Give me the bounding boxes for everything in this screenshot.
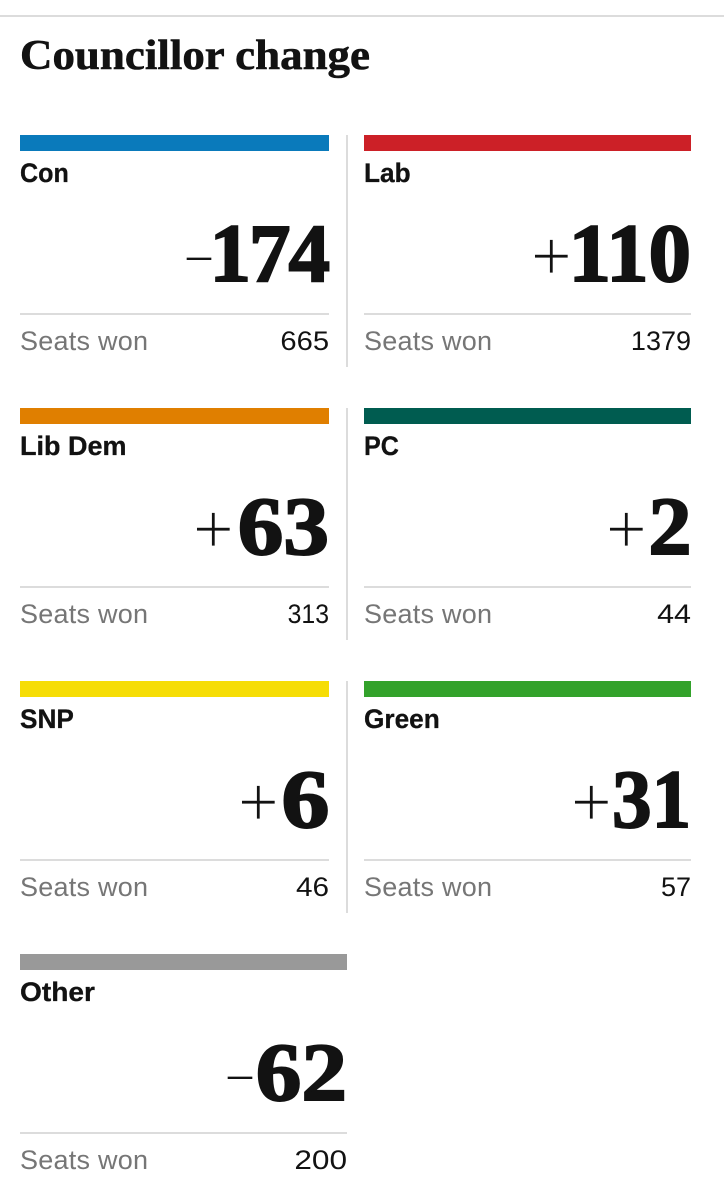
panel: PC [364,408,691,629]
panel: Lab [364,135,691,356]
panel: Green: Green [364,704,440,734]
panel: Con: 174 [210,207,328,299]
panel: Green: Seats won [364,872,492,902]
panel: Lab: Lab [364,158,411,188]
panel: Other: Seats won [20,1145,148,1175]
panel: Other: 62 [256,1026,347,1118]
panel: Con: – [187,228,211,281]
panel: Other: – [228,1047,252,1100]
panel: Lab: 1379 [631,326,691,356]
panel: Green: 57 [661,872,691,902]
panel: SNP: SNP [20,704,74,734]
panel: Lab: + [531,216,572,296]
panel: Con: Seats won [20,326,148,356]
panel: SNP: 6 [281,753,329,845]
panel: Lib Dem: Seats won [20,599,148,629]
panel: Lib Dem: 63 [238,480,329,572]
panel: SNP: 46 [296,872,329,902]
panel: Lib Dem: + [193,489,234,569]
panel: Lab: Seats won [364,326,492,356]
panel: Lib Dem [20,408,329,629]
panel: Other: 200 [294,1145,347,1175]
panel: Lab: 110 [569,207,691,299]
panel: SNP [20,681,329,902]
panel: Lib Dem: 313 [288,599,329,629]
panel: Green [364,681,691,902]
panel: Con: Con [20,158,69,188]
panel: PC: Seats won [364,599,492,629]
panel: SNP: Seats won [20,872,148,902]
panel: Other [20,954,347,1175]
panel: Con: 665 [280,326,329,356]
panel: Lib Dem: Lib Dem [20,431,127,461]
panel: PC: + [606,489,647,569]
panel: PC: 44 [657,599,691,629]
panel: Con [20,135,330,356]
panel: Other: Other [20,977,95,1007]
panel: PC: PC [364,431,399,461]
panel: Green: 31 [612,753,691,845]
panel: Green: + [571,762,612,842]
panel: SNP: + [238,762,279,842]
title: Councillor change [20,33,370,79]
panel: PC: 2 [648,480,691,572]
